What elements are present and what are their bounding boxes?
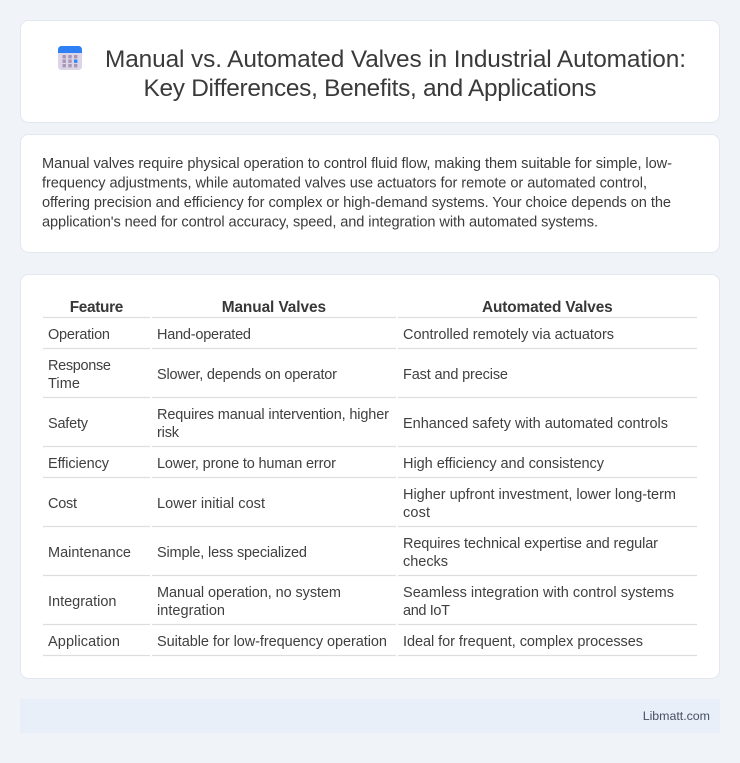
row: Cost [48,487,676,521]
table header row: Automated Valves [482,299,613,316]
text block: introduction paragraph: frequency adjustments, while automated valves use actuators for remote or automated control, [42,176,647,192]
row: Efficiency: Lower, prone to human error [157,456,336,472]
row: Operation: Operation [48,327,110,343]
row: Integration: and IoT [403,603,450,619]
row: Efficiency [48,456,605,472]
row: Efficiency: High efficiency and consistency [403,456,605,472]
panel: comparison table [20,274,720,678]
row: Application: Ideal for frequent, complex processes [403,634,643,650]
footer [20,699,720,733]
row: Safety: Requires manual intervention, higher [157,407,389,423]
row: Integration: Manual operation, no system [157,585,341,601]
row: Cost: Higher upfront investment, lower long-term [403,487,676,503]
row: Cost: Cost [48,496,77,512]
table header row [70,299,613,316]
row: Cost: cost [403,505,430,521]
row: Safety [48,407,668,441]
panel: introduction [20,134,720,252]
row: Application: Application [48,634,120,650]
title: Key Differences, Benefits, and Applications [144,75,596,102]
row: Response Time: Response [48,358,111,374]
row: Maintenance: Requires technical expertise and regular [403,536,658,552]
table header row: Manual Valves [222,299,326,316]
row: Response Time: Time [48,376,80,392]
row: Cost: Lower initial cost [157,496,265,512]
row: Integration: integration [157,603,225,619]
icon: calendar [58,46,82,70]
title [105,46,686,102]
row: Integration: Seamless integration with control systems [403,585,674,601]
row: Response Time: Slower, depends on operator [157,367,337,383]
row: Efficiency: Efficiency [48,456,110,472]
row: Integration [48,585,674,619]
text block: introduction paragraph: application's need for control accuracy, speed, and integration with automated systems. [42,214,598,230]
row: Integration: Integration [48,594,116,610]
row: Safety: risk [157,425,180,441]
panel: title card [20,20,720,122]
row: Maintenance: Maintenance [48,545,131,561]
table header row: Feature [70,299,124,316]
row: Application [48,634,643,650]
row: Maintenance [48,536,658,570]
footer: Libmatt.com [643,709,710,723]
text block: introduction paragraph: Manual valves require physical operation to control fluid flow, making them suitable for simple, low- [42,156,672,172]
text block: introduction paragraph [42,156,672,230]
title: Manual vs. Automated Valves in Industrial Automation: [105,46,686,73]
text block: introduction paragraph: offering precision and efficiency for complex or high-demand systems. Your choice depends on the [42,195,671,211]
row: Maintenance: checks [403,554,448,570]
row: Response Time: Fast and precise [403,367,508,383]
row: Operation: Hand-operated [157,327,251,343]
row: Safety: Enhanced safety with automated controls [403,416,668,432]
row: Maintenance: Simple, less specialized [157,545,307,561]
row: Application: Suitable for low-frequency operation [157,634,387,650]
row: Safety: Safety [48,416,89,432]
row: Operation [48,327,614,343]
row: Operation: Controlled remotely via actuators [403,327,614,343]
row: Response Time [48,358,508,392]
